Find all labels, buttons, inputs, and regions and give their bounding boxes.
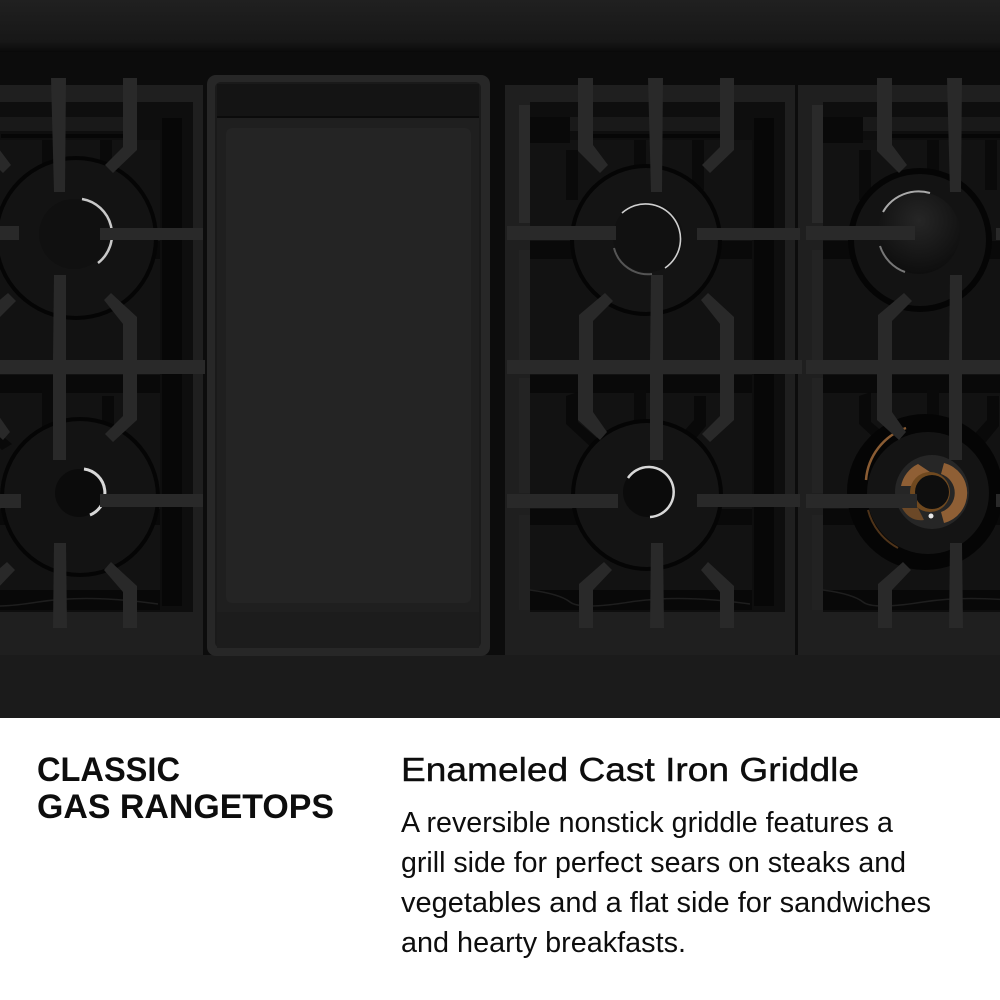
heading: classic gas rangetops: [37, 751, 334, 826]
heading: classic gas rangetops: GAS RANGETOPS: [37, 788, 334, 826]
body text: and hearty breakfasts.: [401, 927, 686, 959]
body text: [401, 807, 931, 959]
right burner module frame: [798, 85, 1000, 655]
body text: A reversible nonstick griddle features a: [401, 807, 894, 839]
grate: right module: [806, 78, 1000, 628]
heading: classic gas rangetops: CLASSIC: [37, 751, 180, 789]
subheading: griddle feature: Enameled Cast Iron Griddle: [401, 751, 859, 788]
photo: cooktop background: [0, 0, 1000, 718]
grate: left module: [0, 78, 205, 628]
body text: vegetables and a flat side for sandwiches: [401, 887, 931, 919]
burner: right rear: [848, 168, 992, 312]
center burner module frame: [505, 85, 795, 655]
burner: right front with exposed brass ring: [847, 414, 1000, 570]
body text: grill side for perfect sears on steaks and: [401, 847, 906, 879]
cooktop front strip: [0, 655, 1000, 718]
left burner module frame: [0, 85, 203, 655]
burner: center front: [571, 419, 723, 571]
cooktop rear strip: [0, 0, 1000, 52]
burner: center rear: [570, 164, 722, 316]
griddle: [207, 75, 490, 656]
burner: left front: [0, 417, 160, 577]
burner: left rear: [0, 156, 158, 320]
caption panel: [0, 718, 1000, 1000]
grate: center module: [507, 78, 802, 628]
